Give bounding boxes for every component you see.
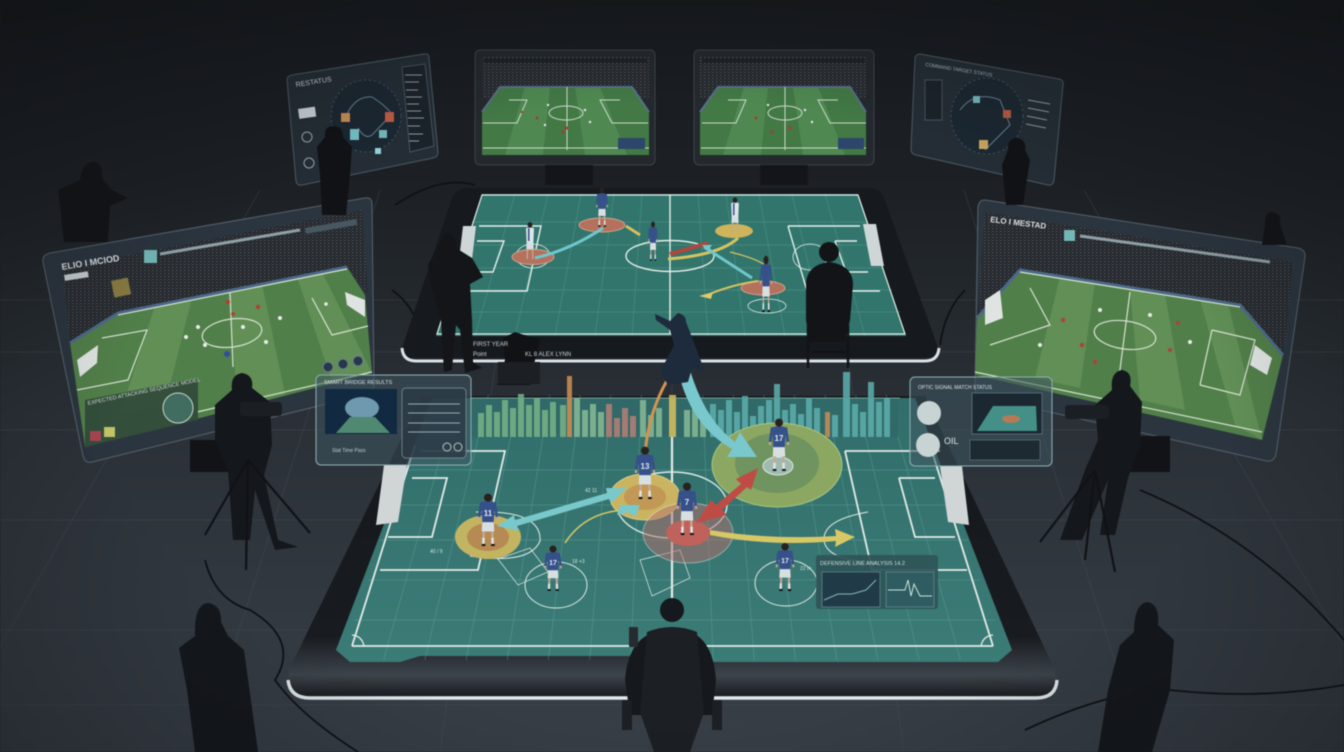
screen header bbox=[61, 219, 357, 281]
seated analyst back right bbox=[806, 242, 853, 368]
bottom left suit man bbox=[179, 603, 258, 752]
centre circles bbox=[498, 472, 817, 608]
monitor crowd bbox=[482, 57, 649, 99]
players bbox=[521, 111, 568, 134]
arrow: yellow pass bbox=[710, 529, 855, 547]
tripod bbox=[205, 460, 310, 570]
small field data labels: 22 m bbox=[800, 566, 811, 572]
centre broadcast camera bbox=[497, 332, 540, 385]
chair bbox=[640, 627, 704, 752]
player 17 low right bbox=[777, 543, 793, 591]
back table caption bbox=[473, 342, 571, 358]
field markings bbox=[437, 195, 905, 334]
back table caption: Point bbox=[473, 352, 487, 358]
floor tile grid bbox=[0, 190, 1344, 752]
table field bbox=[336, 398, 1012, 662]
advertising boards bbox=[70, 267, 347, 343]
monitor pitch bbox=[482, 87, 649, 155]
heat zone: yellow left bbox=[455, 515, 521, 559]
lower overlay panel bbox=[85, 377, 201, 447]
advertising boards bbox=[977, 270, 1283, 355]
far right operator bbox=[1262, 212, 1287, 245]
player 13: 13 bbox=[641, 462, 650, 471]
screen header bbox=[990, 215, 1270, 262]
top right operator bbox=[1002, 138, 1030, 205]
player 17 striker: 17 bbox=[775, 434, 784, 443]
left camera stand bbox=[190, 440, 240, 472]
stand bbox=[760, 165, 808, 185]
panel list bbox=[402, 64, 434, 152]
screen header: ELO I MESTAD bbox=[990, 215, 1047, 231]
player 13 bbox=[636, 447, 654, 499]
pitch stripes bbox=[1035, 277, 1262, 440]
top right tilted data panel bbox=[911, 54, 1063, 185]
small field data labels: 42 11 bbox=[585, 488, 597, 494]
back table caption: FIRST YEAR bbox=[473, 342, 509, 348]
table field bbox=[436, 194, 906, 336]
camera bbox=[240, 402, 282, 416]
panel text: COMMAND TARGET STATUS bbox=[925, 62, 993, 79]
small field data labels: 18 +3 bbox=[572, 559, 585, 565]
player 11 bbox=[479, 494, 497, 546]
arrow: cyan double pass bbox=[497, 488, 627, 531]
left cameraman bbox=[205, 373, 310, 570]
left large video wall screen bbox=[43, 198, 374, 462]
stadium crowd bbox=[62, 210, 368, 343]
presenter: back left man with tablet bbox=[428, 233, 483, 373]
heat zones bbox=[579, 218, 625, 232]
lower overlay panel: EXPECTED ATTACKING SEQUENCE MODEL bbox=[87, 377, 201, 407]
bar chart strip bbox=[470, 372, 900, 437]
crest bbox=[111, 277, 131, 298]
mini analytics panel: DEFENSIVE LINE ANALYSIS 14.2 bbox=[820, 561, 905, 567]
back tactical table bbox=[402, 187, 939, 361]
field grid bbox=[354, 395, 995, 660]
top left operator bbox=[317, 126, 352, 215]
heat zone: yellow middle bbox=[610, 474, 680, 520]
left glass overlay panel bbox=[316, 375, 471, 465]
right glass overlay panel bbox=[910, 377, 1052, 466]
heat zone: red bbox=[643, 503, 733, 563]
field grid bbox=[442, 194, 900, 336]
arrows on back table bbox=[535, 226, 765, 296]
gauge: bottom bbox=[916, 433, 940, 457]
overlay bar bbox=[484, 58, 647, 63]
left top monitor bbox=[475, 50, 655, 185]
camera bbox=[1065, 405, 1109, 419]
gauge value: OIL bbox=[944, 436, 959, 446]
gauge: top bbox=[917, 401, 941, 425]
gauges bbox=[323, 356, 363, 372]
chair analyst foreground bbox=[622, 598, 722, 752]
small field data labels bbox=[430, 488, 811, 572]
tripod bbox=[1040, 470, 1115, 572]
player 7 bbox=[678, 483, 696, 535]
panel title: OPTIC SIGNAL MATCH STATUS bbox=[918, 385, 993, 391]
stadium crowd bbox=[977, 212, 1293, 355]
right top monitor bbox=[694, 50, 874, 185]
overlay bar bbox=[702, 58, 865, 63]
pitch bbox=[975, 270, 1283, 440]
arrow: red double run bbox=[696, 468, 758, 523]
table white rim bbox=[288, 680, 1057, 698]
radar circle bbox=[331, 80, 401, 154]
panel title: SMART BRIDGE RESULTS bbox=[324, 380, 392, 386]
players bbox=[754, 116, 792, 134]
centre crouching analyst bbox=[655, 313, 705, 385]
mini analytics panel bbox=[816, 555, 938, 609]
player 17 low right: 17 bbox=[781, 558, 789, 565]
pitch thumbnail bbox=[972, 393, 1042, 434]
field markings bbox=[352, 437, 993, 646]
arrow: large cyan run bbox=[678, 370, 757, 457]
monitor pitch bbox=[700, 87, 866, 155]
goals bbox=[458, 224, 884, 268]
pitch stripes bbox=[120, 272, 372, 414]
table bezel bbox=[288, 396, 1056, 696]
holographic pitch image bbox=[325, 389, 397, 434]
panel title: RESTATUS bbox=[295, 76, 332, 89]
pitch markings bbox=[975, 272, 1262, 432]
stand bbox=[545, 165, 593, 185]
heat zone: large green bbox=[712, 423, 842, 507]
pitch markings bbox=[77, 269, 372, 412]
players bbox=[226, 300, 260, 316]
right camera stand bbox=[1128, 436, 1170, 472]
players bbox=[1061, 318, 1180, 364]
pitch bbox=[70, 267, 372, 447]
player 17 low left: 17 bbox=[549, 560, 557, 567]
small field data labels: 40 / 9 bbox=[430, 549, 443, 555]
back table players bbox=[526, 222, 534, 259]
back table caption: KL 8 ALEX LYNN bbox=[525, 352, 571, 358]
player 17 low left bbox=[545, 546, 561, 591]
main tactical table bbox=[288, 370, 1057, 698]
right cameraman bbox=[1040, 370, 1142, 572]
far left operator bbox=[58, 162, 128, 242]
bottom right suit man bbox=[1098, 602, 1174, 752]
goals bbox=[376, 465, 969, 525]
player 11: 11 bbox=[484, 509, 493, 518]
monitor crowd bbox=[700, 57, 866, 99]
arrow: thin yellow curve bbox=[565, 505, 640, 543]
screen header: ELIO I MCIOD bbox=[61, 253, 121, 272]
top left tilted data panel bbox=[287, 54, 438, 185]
right large video wall screen bbox=[975, 200, 1305, 461]
arrow: orange high pass bbox=[645, 372, 672, 455]
goals bbox=[985, 290, 1003, 325]
players on main table bbox=[479, 419, 793, 591]
player 7: 7 bbox=[685, 498, 690, 507]
player 17 striker bbox=[770, 419, 788, 471]
goals bbox=[77, 345, 98, 377]
cables on the floor bbox=[205, 182, 1344, 752]
table bezel bbox=[402, 188, 938, 358]
list panel bbox=[402, 388, 466, 458]
table white rim bbox=[402, 348, 939, 361]
left glass overlay panel: Stat Time Pass bbox=[332, 448, 366, 454]
